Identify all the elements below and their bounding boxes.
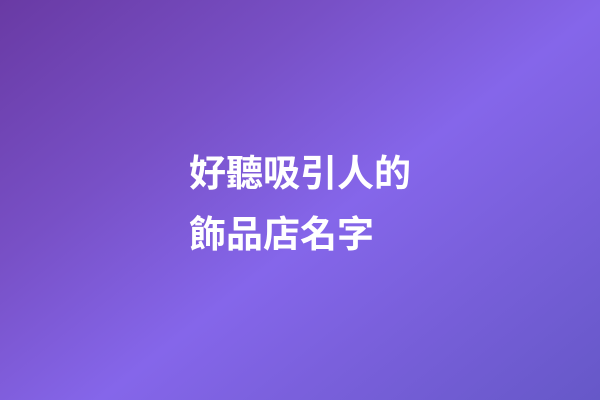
title line 1: 好聽吸引人的: [189, 153, 411, 194]
title line 2: 飾品店名字: [189, 214, 374, 255]
title: [189, 153, 411, 255]
